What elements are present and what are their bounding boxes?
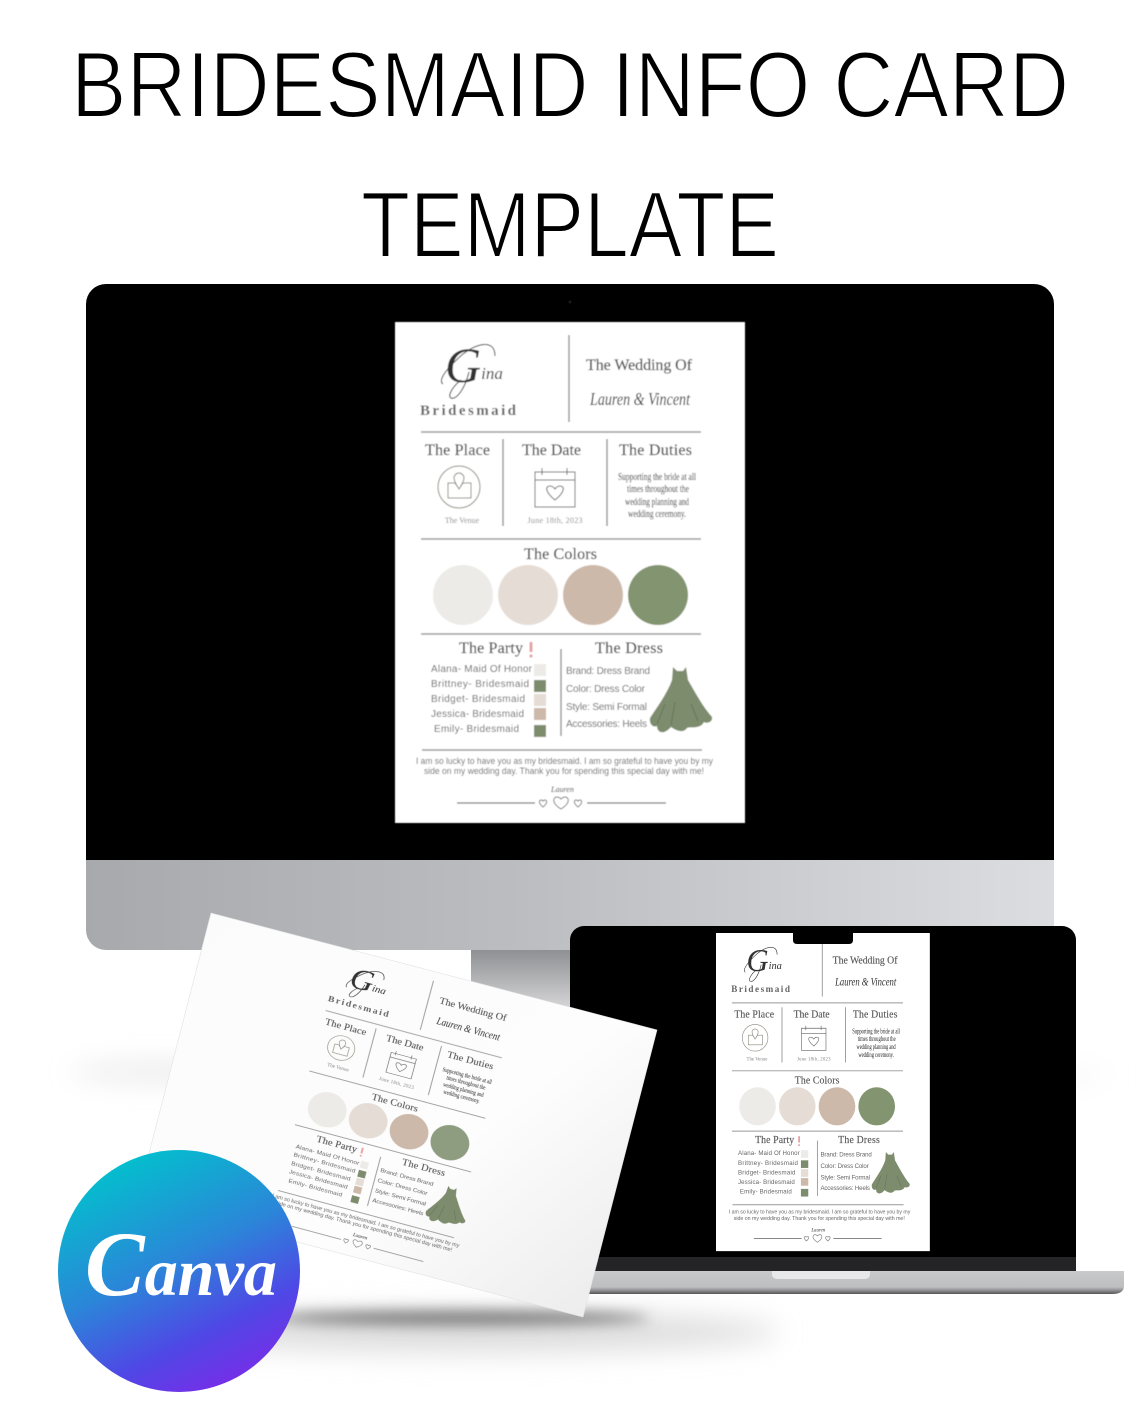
- monitor chin: [86, 860, 1054, 950]
- laptop camera notch: [793, 933, 853, 944]
- wedding of: [433, 996, 508, 1044]
- card on tilted paper: [265, 955, 524, 1273]
- the dress: Brand: Dress Brand: [566, 666, 650, 677]
- the colors: [433, 546, 688, 625]
- wedding of: [833, 955, 898, 989]
- the party: Brittney- Bridesmaid: [293, 1152, 357, 1175]
- the dress: Accessories: Heels: [372, 1197, 424, 1217]
- the dress: Color: Dress Color: [566, 684, 646, 695]
- the place: The Place: [734, 1009, 775, 1021]
- the dress: Style: Semi Formal: [820, 1174, 870, 1181]
- the duties: The Duties: [446, 1050, 495, 1072]
- the dress: [820, 1135, 910, 1194]
- the colors: [304, 1077, 476, 1165]
- the dress: The Dress: [401, 1158, 446, 1179]
- the duties: Supporting the bride at all: [442, 1066, 493, 1086]
- the place: [425, 442, 490, 525]
- name block: [731, 943, 791, 995]
- the party: [286, 1130, 373, 1204]
- name block: ina: [769, 961, 782, 972]
- laptop screen: [570, 926, 1076, 1272]
- the party: Emily- Bridesmaid: [434, 724, 519, 735]
- footer hearts: [291, 1223, 424, 1265]
- the date: [375, 1033, 426, 1091]
- the dress: The Dress: [838, 1135, 880, 1146]
- name block: G: [747, 943, 769, 978]
- monitor stand: [471, 950, 671, 1065]
- canva logo: [58, 1150, 300, 1392]
- the date: June 18th, 2023: [378, 1077, 415, 1091]
- the duties: wedding ceremony.: [628, 508, 686, 520]
- the duties: The Duties: [619, 442, 692, 459]
- the party: The Party: [315, 1135, 358, 1155]
- the place: [734, 1009, 775, 1063]
- message: side on my wedding day. Thank you for spending this special day with me!: [424, 766, 704, 776]
- the party: Alana- Maid Of Honor: [738, 1150, 800, 1157]
- the party: Alana- Maid Of Honor: [295, 1143, 360, 1167]
- the duties: wedding planning and: [857, 1044, 896, 1051]
- wedding of: Lauren & Vincent: [435, 1015, 502, 1044]
- name block: Bridesmaid: [420, 403, 517, 419]
- the party: Alana- Maid Of Honor: [431, 664, 533, 675]
- wedding of: The Wedding Of: [833, 955, 898, 967]
- laptop hinge: [570, 1257, 1076, 1271]
- the dress: Brand: Dress Brand: [820, 1151, 872, 1159]
- the duties: times throughout the: [446, 1075, 486, 1092]
- the party: Bridget- Bridesmaid: [431, 694, 525, 705]
- card on monitor: [395, 322, 745, 823]
- name block: ina: [481, 364, 503, 383]
- the duties: times throughout the: [627, 483, 689, 495]
- message: I am so lucky to have you as my bridesmaid. I am so grateful to have you by my: [272, 1194, 460, 1249]
- the place: The Venue: [326, 1063, 350, 1074]
- the dress: Brand: Dress Brand: [380, 1167, 435, 1188]
- message: I am so lucky to have you as my bridesmaid. I am so grateful to have you by my: [729, 1210, 910, 1216]
- the duties: times throughout the: [858, 1036, 896, 1043]
- the duties: The Duties: [853, 1009, 898, 1021]
- the date: The Date: [522, 442, 581, 459]
- title: [71, 32, 1069, 277]
- laptop trackpad notch: [772, 1271, 870, 1279]
- the duties: Supporting the bride at all: [618, 471, 696, 483]
- message: [729, 1210, 910, 1222]
- the party: Brittney- Bridesmaid: [431, 679, 529, 690]
- the duties: wedding ceremony.: [442, 1089, 481, 1105]
- message: [416, 756, 713, 776]
- footer hearts: [457, 797, 666, 809]
- the dress: Style: Semi Formal: [566, 702, 647, 713]
- the colors: [739, 1075, 895, 1125]
- name block: [327, 957, 401, 1020]
- the date: June 18th, 2023: [528, 516, 582, 525]
- the colors: The Colors: [524, 546, 597, 563]
- name block: [420, 337, 517, 419]
- footer hearts: [754, 1235, 882, 1242]
- the party: Bridget- Bridesmaid: [290, 1160, 352, 1183]
- name block: G: [347, 961, 378, 999]
- the dress: The Dress: [595, 640, 663, 657]
- name block: Bridesmaid: [731, 985, 791, 995]
- the place: The Venue: [445, 516, 480, 525]
- the party: Emily- Bridesmaid: [740, 1188, 792, 1195]
- the dress: Style: Semi Formal: [374, 1188, 427, 1208]
- the duties: Supporting the bride at all: [852, 1028, 900, 1035]
- the colors: The Colors: [370, 1092, 419, 1115]
- the date: June 18th, 2023: [797, 1058, 831, 1063]
- the duties: wedding ceremony.: [858, 1052, 894, 1059]
- the duties: wedding planning and: [442, 1082, 485, 1099]
- signature: Lauren: [550, 785, 574, 794]
- the date: [794, 1009, 831, 1063]
- name block: G: [445, 337, 481, 393]
- the place: The Place: [324, 1017, 368, 1038]
- card on laptop: [716, 933, 930, 1251]
- name block: Bridesmaid: [327, 994, 391, 1020]
- the place: [314, 1017, 368, 1076]
- wedding of: [586, 357, 693, 409]
- the duties: [436, 1050, 497, 1107]
- laptop base: [570, 1271, 1124, 1294]
- monitor camera: [568, 300, 572, 304]
- the date: [522, 442, 582, 525]
- the place: The Place: [425, 442, 490, 459]
- the duties: [852, 1009, 900, 1059]
- the place: The Venue: [746, 1058, 768, 1063]
- canva logo: Canva: [85, 1213, 277, 1315]
- wedding of: Lauren & Vincent: [589, 389, 691, 409]
- the party: The Party: [755, 1135, 794, 1146]
- the party: Jessica- Bridesmaid: [431, 709, 524, 720]
- the dress: [371, 1153, 477, 1229]
- message: side on my wedding day. Thank you for spending this special day with me!: [734, 1216, 905, 1222]
- the date: The Date: [385, 1033, 425, 1053]
- signature: Lauren: [810, 1228, 826, 1233]
- the dress: Accessories: Heels: [566, 719, 647, 730]
- wedding of: The Wedding Of: [586, 357, 693, 374]
- title: TEMPLATE: [361, 172, 779, 277]
- the party: Emily- Bridesmaid: [288, 1178, 343, 1199]
- monitor screen: [86, 284, 1054, 860]
- the party: Jessica- Bridesmaid: [288, 1169, 349, 1191]
- the duties: wedding planning and: [625, 496, 689, 508]
- the date: The Date: [794, 1009, 830, 1021]
- the party: [431, 640, 546, 737]
- tilted paper: [137, 913, 657, 1317]
- the party: [738, 1135, 808, 1197]
- signature: Lauren: [351, 1233, 368, 1242]
- the party: Brittney- Bridesmaid: [738, 1160, 798, 1167]
- the colors: The Colors: [795, 1075, 840, 1087]
- the duties: [618, 442, 696, 520]
- the party: The Party: [459, 640, 523, 657]
- the dress: [566, 640, 712, 732]
- wedding of: The Wedding Of: [438, 996, 508, 1024]
- the party: Jessica- Bridesmaid: [738, 1179, 795, 1186]
- the party: Bridget- Bridesmaid: [738, 1169, 796, 1176]
- name block: ina: [371, 983, 387, 997]
- the dress: Accessories: Heels: [820, 1185, 870, 1192]
- message: I am so lucky to have you as my bridesmaid. I am so grateful to have you by my: [416, 756, 713, 766]
- the dress: Color: Dress Color: [377, 1177, 428, 1197]
- wedding of: Lauren & Vincent: [834, 977, 897, 989]
- floor shadows: [70, 1065, 1110, 1352]
- message: side on my wedding day. Thank you for spending this special day with me!: [275, 1201, 453, 1254]
- the dress: Color: Dress Color: [820, 1163, 869, 1170]
